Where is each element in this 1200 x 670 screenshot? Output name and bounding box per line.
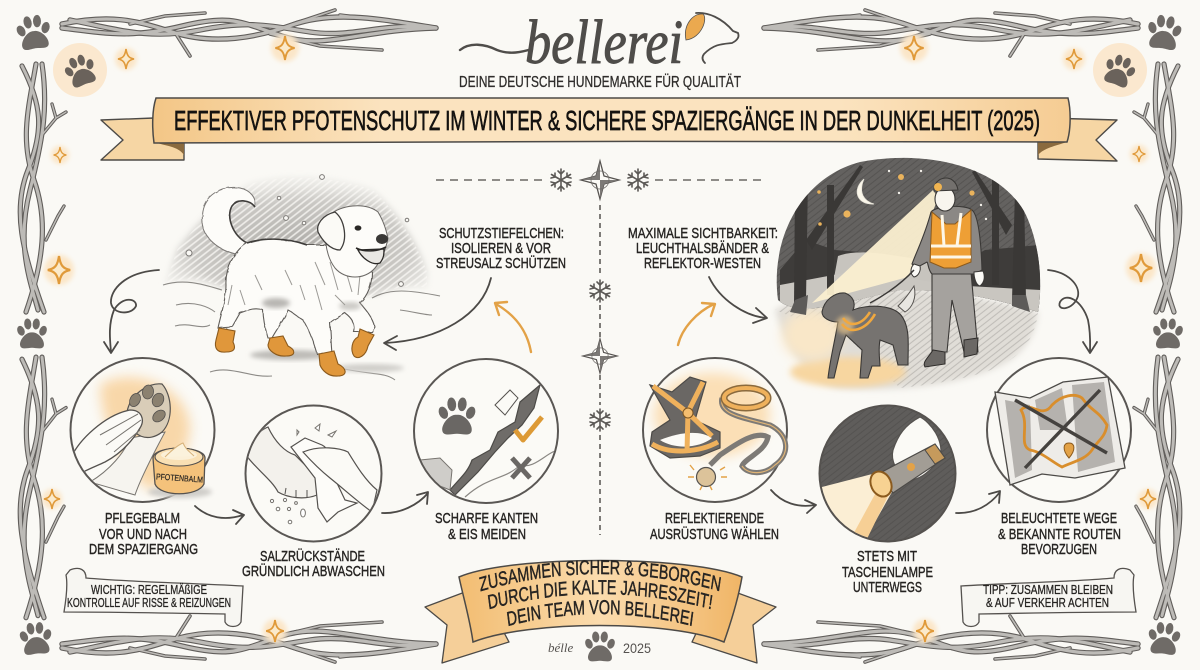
signature: bélle: [548, 640, 573, 655]
note scroll left: [64, 568, 243, 626]
dog with protective boots illustration: [163, 175, 440, 385]
step: wash caption: [242, 547, 385, 580]
step: wash circle: [246, 406, 382, 542]
boots: [924, 338, 978, 367]
note scroll left: KONTROLLE AUF RISSE & REIZUNGEN: [67, 596, 231, 610]
flashlight: [866, 444, 945, 500]
logo: [460, 9, 739, 77]
leg and paw: [246, 427, 320, 498]
step: flashlight caption: TASCHENLAMPE: [842, 564, 933, 581]
step: sharp edges caption: SCHARFE KANTEN: [435, 510, 538, 527]
note scroll right: [961, 568, 1136, 626]
top right vine: [764, 10, 1138, 56]
step: sharp edges circle: [414, 359, 560, 503]
step: flashlight circle: [818, 406, 956, 545]
left vine upper: [20, 64, 66, 312]
step: route map caption: BEVORZUGEN: [1021, 541, 1097, 558]
note scroll left: WICHTIG: REGELMÄßIGE: [91, 583, 207, 597]
paw with pads: [127, 384, 170, 437]
light beam: [812, 190, 938, 303]
step: gear circle: [643, 358, 787, 502]
step: balm caption: [89, 510, 198, 558]
night sky: [777, 158, 1040, 312]
title banner: [101, 98, 1117, 161]
right ribbon tail: [1038, 118, 1117, 161]
boots caption: ISOLIEREN & VOR: [451, 240, 551, 257]
step: flashlight caption: UNTERWEGS: [853, 579, 922, 596]
tree trunks below horizon: [790, 295, 1030, 315]
harness: [650, 377, 720, 458]
visibility caption: MAXIMALE SICHTBARKEIT:: [628, 225, 778, 242]
boots caption: [436, 225, 566, 272]
closing banner: [424, 560, 777, 664]
logo wordmark: bellerei: [525, 9, 683, 77]
snow shading: [165, 178, 427, 297]
trees: [794, 165, 1026, 305]
tagline: DEINE DEUTSCHE HUNDEMARKE FÜR QUALITÄT: [459, 73, 741, 91]
snow ground: [163, 283, 440, 385]
body: [218, 239, 375, 354]
step: route map caption: BELEUCHTETE WEGE: [1001, 510, 1117, 527]
stars: [817, 174, 975, 226]
reflective vest: [930, 210, 971, 268]
step: sharp edges caption: & EIS MEIDEN: [448, 526, 526, 543]
balm jar: PFOTENBALM: [156, 471, 203, 485]
tail: [202, 187, 255, 255]
ribbon body: [153, 98, 1070, 143]
top left vine: [62, 10, 436, 56]
arrows: [104, 270, 1097, 524]
visibility caption: LEUCHTHALSBÄNDER &: [636, 240, 769, 257]
central divider: [436, 161, 765, 535]
banner text: DURCH DIE KALTE JAHRESZEIT!: [488, 580, 712, 610]
step: gear caption: AUSRÜSTUNG WÄHLEN: [650, 525, 779, 543]
tag: [688, 465, 727, 490]
step: wash caption: GRÜNDLICH ABWASCHEN: [242, 562, 385, 580]
step: sharp edges caption: [435, 510, 538, 543]
ground: [775, 289, 1038, 389]
boots: [215, 328, 374, 376]
night walk illustration: [775, 158, 1040, 389]
right vine upper: [1134, 64, 1180, 312]
banner body: [459, 560, 742, 642]
step: flashlight caption: [842, 548, 933, 596]
pin: [1064, 443, 1074, 458]
legs: [932, 272, 978, 352]
step: gear caption: REFLEKTIERENDE: [665, 510, 764, 527]
step: route map caption: & BEKANNTE ROUTEN: [998, 526, 1121, 543]
map: [995, 377, 1125, 485]
snowflakes: [186, 175, 409, 286]
bushes: [780, 242, 1040, 312]
boots caption: STREUSALZ SCHÜTZEN: [436, 254, 566, 272]
moon: [857, 179, 874, 204]
note scroll right: & AUF VERKEHR ACHTEN: [986, 596, 1109, 610]
bottom left vine: [62, 616, 436, 662]
step: balm caption: DEM SPAZIERGANG: [89, 541, 198, 558]
ear: [318, 212, 345, 250]
light beam: [822, 474, 892, 537]
cross: [1015, 390, 1107, 468]
night dog: [822, 286, 915, 378]
arm: [90, 432, 165, 495]
paw print: [437, 397, 477, 435]
step: route map circle: [987, 358, 1131, 502]
face: [355, 225, 361, 231]
logo swoosh: [460, 45, 532, 53]
head: [935, 187, 955, 211]
step: balm caption: VOR UND NACH: [99, 526, 187, 543]
step: route map caption: [998, 510, 1121, 558]
fur shading: [262, 298, 290, 308]
left ribbon tail: [101, 118, 184, 160]
banner text: DEIN TEAM VON BELLEREI: [506, 600, 694, 626]
head: [325, 206, 388, 277]
glowing collar: [836, 316, 854, 334]
cross mark: [512, 458, 530, 478]
step: gear caption: [650, 510, 779, 543]
visibility caption: REFLEKTOR-WESTEN: [644, 255, 761, 272]
step: flashlight caption: STETS MIT: [857, 548, 917, 565]
hand: [892, 417, 941, 480]
banner text: ZUSAMMEN SICHER & GEBORGEN: [479, 560, 721, 592]
hand: [303, 448, 377, 512]
salt drops: [270, 424, 336, 524]
leash: [870, 270, 914, 303]
footer paw: [584, 631, 616, 661]
cloth: [291, 438, 357, 522]
leash roll and cord: [710, 388, 786, 473]
route outline: [1021, 395, 1107, 467]
step: wash caption: SALZRÜCKSTÄNDE: [260, 547, 365, 565]
check mark: [515, 417, 542, 440]
step: balm caption: PFLEGEBALM: [105, 510, 180, 527]
person: [911, 178, 984, 367]
orange glow: [790, 357, 906, 387]
fold shadows: [154, 142, 184, 155]
bottom right vine: [764, 616, 1138, 662]
logo dog head: [685, 13, 739, 63]
right tail: [692, 592, 776, 663]
left vine lower: [20, 357, 66, 618]
hand: [74, 409, 144, 472]
visibility caption: [628, 225, 778, 272]
balm jar: [148, 443, 212, 498]
step: balm circle: [70, 358, 214, 502]
banner text: [479, 560, 721, 626]
ice crack: [450, 385, 540, 495]
glowing paw left: [53, 43, 107, 97]
boots caption: SCHUTZSTIEFELCHEN:: [439, 225, 564, 242]
jacket: [912, 206, 982, 274]
right vine lower: [1134, 357, 1180, 618]
note scroll right: TIPP: ZUSAMMEN BLEIBEN: [983, 583, 1113, 597]
left tail: [425, 592, 509, 663]
year: 2025: [623, 640, 651, 656]
glowing paw right: [1093, 43, 1147, 97]
